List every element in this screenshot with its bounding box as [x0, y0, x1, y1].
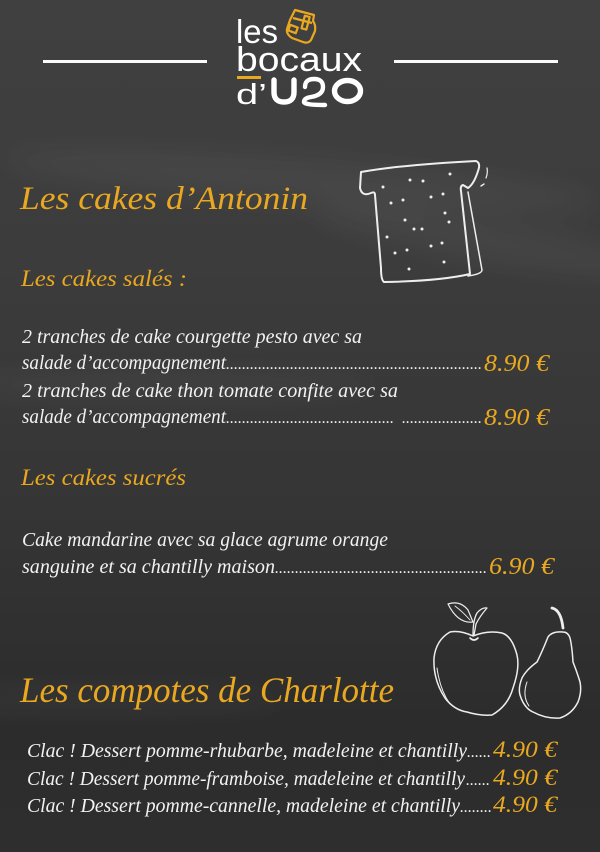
- logo: les bocaux d'Ugo: [236, 10, 362, 111]
- menu item: cake courgette pesto: 2 tranches de cake courgette pesto avec sa: [22, 326, 362, 348]
- menu item: cake mandarine: [22, 529, 555, 580]
- menu item: cake courgette pesto: 8.90 €: [484, 351, 550, 377]
- logo word: d': d’: [236, 79, 267, 111]
- logo word: UGO: [274, 79, 360, 105]
- icon: toast: [360, 161, 487, 282]
- menu item: pomme-framboise: ......: [466, 772, 490, 789]
- menu item: pomme-rhubarbe: Clac ! Dessert pomme-rhubarbe, madeleine et chantilly: [27, 740, 467, 762]
- heading: Les compotes de Charlotte: Les compotes de Charlotte: [19, 670, 394, 710]
- menu item: cake courgette pesto: salade d’accompagnement: [22, 352, 226, 374]
- header rule right: [394, 60, 558, 63]
- logo word: les: les: [236, 13, 278, 50]
- menu item: pomme-cannelle: Clac ! Dessert pomme-cannelle, madeleine et chantilly: [27, 795, 460, 817]
- menu item: pomme-framboise: Clac ! Dessert pomme-framboise, madeleine et chantilly: [27, 768, 465, 790]
- header rule left: [43, 60, 207, 63]
- menu item: cake thon tomate: 2 tranches de cake thon tomate confite avec sa: [22, 380, 398, 402]
- subheading: Les cakes salés: Les cakes salés :: [20, 266, 187, 291]
- logo word: bocaux: bocaux: [236, 41, 362, 79]
- menu item: cake mandarine: .....................................................: [275, 560, 487, 577]
- icon: apple and pear: [434, 603, 581, 718]
- subheading: Les cakes sucrés: Les cakes sucrés: [20, 465, 186, 490]
- menu item: cake thon tomate: 8.90 €: [484, 405, 550, 431]
- heading: Les cakes d'Antonin: Les cakes d’Antonin: [19, 181, 308, 217]
- icon: jar: [287, 10, 315, 43]
- menu item: pomme-cannelle: 4.90 €: [493, 792, 559, 817]
- menu item: cake courgette pesto: ................................................................: [226, 356, 482, 373]
- logo accent bar: [237, 76, 261, 79]
- menu item: cake courgette pesto: [22, 326, 550, 377]
- icon: apple: [434, 603, 518, 715]
- menu item: cake thon tomate: ....................: [402, 410, 482, 427]
- menu item: cake mandarine: 6.90 €: [489, 554, 555, 580]
- menu item: cake thon tomate: salade d’accompagnement: [22, 406, 226, 428]
- menu item: pomme-framboise: 4.90 €: [493, 765, 559, 790]
- icon: pear: [519, 608, 581, 718]
- menu item: pomme-rhubarbe: ......: [467, 744, 491, 761]
- menu item: cake thon tomate: [22, 380, 550, 431]
- menu item: pomme-cannelle: ........: [460, 799, 492, 816]
- menu item: cake mandarine: sanguine et sa chantilly maison: [22, 556, 275, 578]
- menu item: cake mandarine: Cake mandarine avec sa glace agrume orange: [22, 529, 388, 551]
- menu item: pomme-rhubarbe: 4.90 €: [493, 737, 559, 762]
- menu item: cake thon tomate: ..........................................: [226, 410, 394, 427]
